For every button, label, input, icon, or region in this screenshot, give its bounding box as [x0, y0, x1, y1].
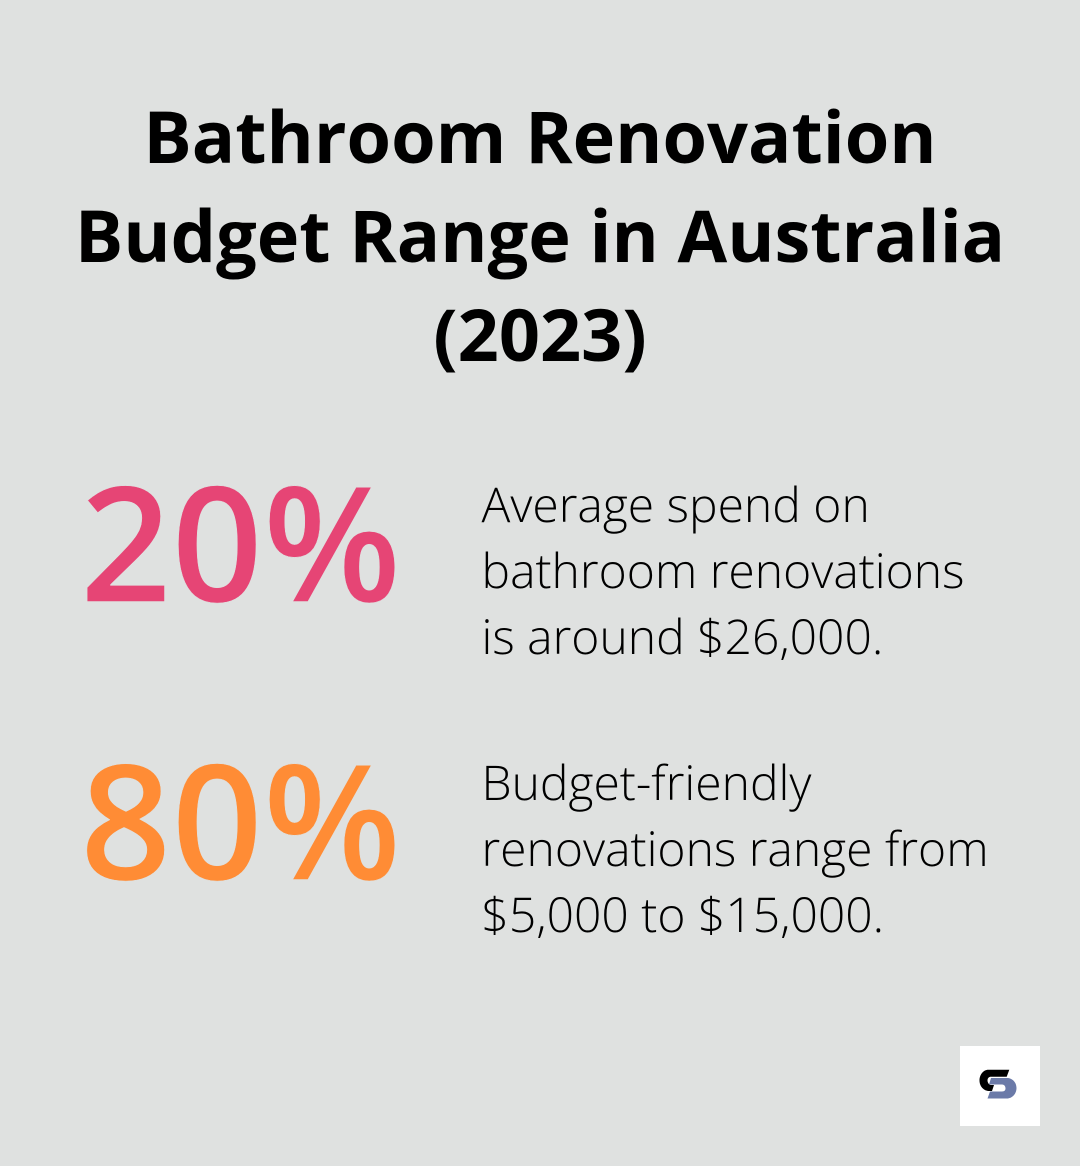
stat description: budget-friendly: Budget-friendly	[482, 750, 812, 815]
logo badge	[960, 1046, 1040, 1126]
logo mark: dark stroke	[980, 1070, 1009, 1091]
stat description: average spend: is around $26,000.	[482, 604, 883, 669]
stat description: average spend	[482, 472, 964, 669]
stat description: budget-friendly: renovations range from	[482, 816, 989, 881]
stat description: average spend: bathroom renovations	[482, 538, 964, 603]
title: Budget Range in Australia	[75, 186, 1005, 284]
title	[75, 87, 1005, 383]
stat value 20%: 20%	[80, 430, 401, 648]
stat description: budget-friendly	[482, 750, 989, 947]
logo mark: blue stroke	[988, 1078, 1016, 1098]
stat description: budget-friendly: $5,000 to $15,000.	[482, 882, 884, 947]
stat: 20%	[80, 430, 964, 669]
title: (2023)	[433, 285, 647, 383]
title: Bathroom Renovation	[143, 87, 937, 185]
stat description: average spend: Average spend on	[482, 472, 870, 537]
stat value 80%: 80%	[80, 708, 401, 926]
stat: 80%	[80, 708, 989, 947]
